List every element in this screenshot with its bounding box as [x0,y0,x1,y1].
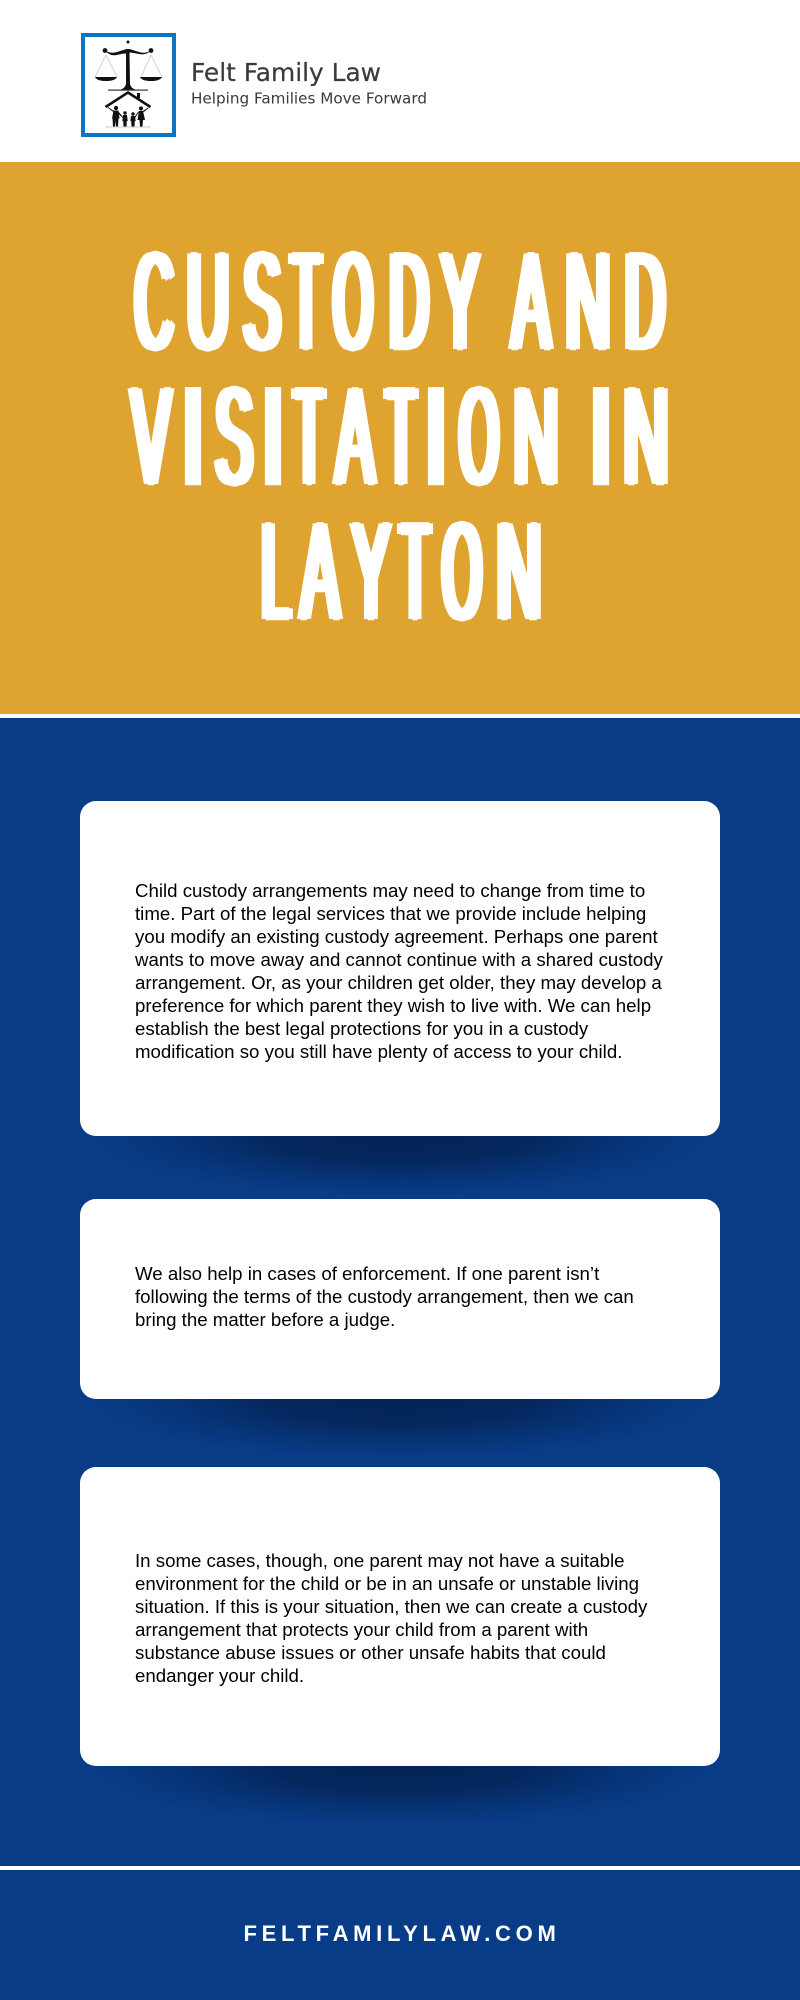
title banner: D [625,224,665,379]
text block: enforcement: We also help in cases of enforcement. If one parent isn’t [135,1263,599,1284]
text block: modification: wants to move away and cannot continue with a shared custody [135,949,663,970]
title banner: S [215,359,253,514]
title banner: N [623,359,669,514]
title banner: Y [352,494,390,649]
title banner: I [581,359,621,514]
text block: unsafe environment: arrangement that protects your child from a parent with [135,1619,588,1640]
title banner: O [460,359,498,514]
text block: unsafe environment: situation. If this is your situation, then we can create a custody [135,1596,647,1617]
title banner: T [291,224,321,379]
text block: unsafe environment [135,1550,648,1686]
title banner: U [187,224,229,379]
text block: modification: time. Part of the legal services that we provide include helping [135,903,646,924]
title banner: L [262,494,290,649]
logo text: Felt Family Law [191,58,381,87]
text block: modification: establish the best legal protections for you in a custody [135,1018,588,1039]
title banner: T [294,359,324,514]
text block: enforcement: bring the matter before a judge. [135,1309,395,1330]
title banner: D [389,224,429,379]
text block: unsafe environment: endanger your child. [135,1665,304,1686]
title banner: I [253,359,293,514]
logo mark: scales of justice and family in a house [83,35,174,135]
logo text: Helping Families Move Forward [191,90,427,108]
title banner: V [132,359,170,514]
text block: modification: preference for which parent they wish to live with. We can help [135,995,651,1016]
panel: card two [80,1199,720,1399]
footer website: FELTFAMILYLAW.COM [243,1921,560,1946]
title banner: O [334,224,372,379]
text block: unsafe environment: In some cases, though, one parent may not have a suitable [135,1550,625,1571]
title banner: Y [441,224,479,379]
title banner: A [512,224,550,379]
title banner: S [243,224,281,379]
title banner: I [173,359,213,514]
title banner: O [443,494,481,649]
text block: enforcement: following the terms of the custody arrangement, then we can [135,1286,634,1307]
shadow under card three [90,1766,710,1826]
title banner: A [336,359,374,514]
header: logo area [0,0,800,162]
title banner: N [565,224,611,379]
title banner: N [496,494,542,649]
text block: unsafe environment: environment for the child or be in an unsafe or unstable living [135,1573,639,1594]
text block: modification: Child custody arrangements may need to change from time to [135,880,645,901]
title banner: N [513,359,559,514]
text block: modification: modification so you still have plenty of access to your child. [135,1041,622,1062]
shadow under card one [90,1136,710,1196]
title banner: A [301,494,339,649]
text block: modification [135,880,663,1062]
text block: modification: arrangement. Or, as your children get older, they may develop a [135,972,662,993]
footer divider line [0,1866,800,1870]
shadow under card two [90,1399,710,1459]
title banner: C [135,224,173,379]
text block: enforcement [135,1263,634,1330]
divider and blue background panel [0,718,800,2000]
title banner: T [386,359,416,514]
panel: card three [80,1467,720,1766]
panel: card one [80,801,720,1136]
title banner [0,162,800,714]
logo text [191,58,427,108]
text block: unsafe environment: substance abuse issues or other unsafe habits that could [135,1642,606,1663]
title banner: T [400,494,430,649]
text block: modification: you modify an existing custody agreement. Perhaps one parent [135,926,658,947]
logo [81,33,427,137]
title banner: I [416,359,456,514]
